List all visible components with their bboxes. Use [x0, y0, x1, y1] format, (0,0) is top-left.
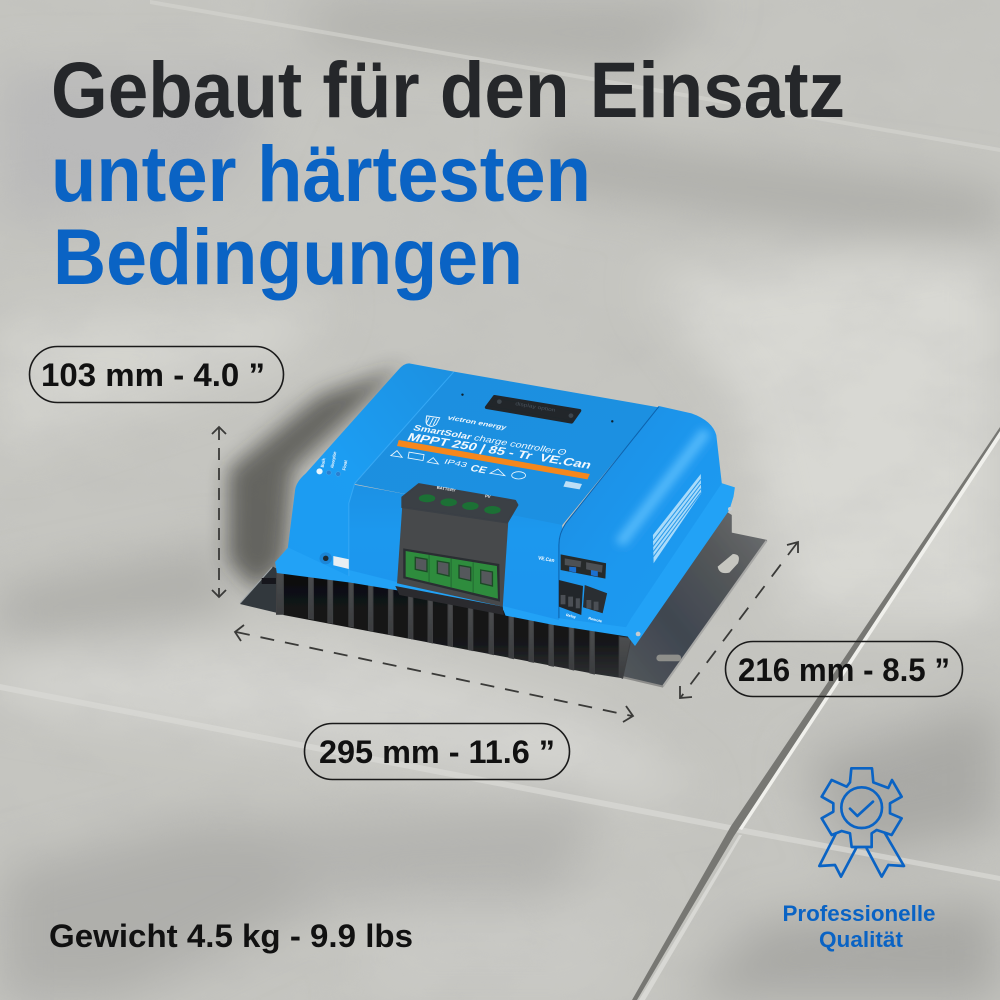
quality label: Professionelle — [782, 901, 936, 926]
pill: depth: 216 mm - 8.5 ” — [738, 652, 950, 688]
relay and remote connectors: Relay — [566, 613, 577, 620]
housing top face — [355, 372, 659, 525]
housing right cover — [559, 406, 722, 627]
victron logo — [422, 416, 440, 427]
title: unter härtesten — [51, 129, 591, 218]
warning icons — [391, 451, 525, 479]
CE mark: CE — [468, 464, 489, 476]
protection rating: IP43 — [443, 457, 469, 469]
title — [51, 45, 845, 301]
rating label — [653, 474, 701, 563]
pill: height: 103 mm - 4.0 ” — [41, 357, 265, 393]
terminal block — [395, 484, 518, 615]
quality label — [782, 901, 936, 952]
solar charge controller device — [240, 363, 767, 687]
screws — [461, 393, 613, 422]
flange screws — [636, 507, 732, 636]
quality label: Qualität — [819, 927, 904, 952]
height dimension arrow — [212, 427, 226, 597]
depth dimension arrow — [680, 542, 798, 698]
pill: depth — [726, 642, 962, 696]
pill: width: 295 mm - 11.6 ” — [319, 734, 555, 770]
pill: width — [304, 724, 570, 780]
terminal block: BATTERY — [436, 485, 456, 493]
VE.Can ports — [538, 554, 606, 579]
status LEDs — [316, 468, 341, 476]
housing left cover — [288, 363, 454, 576]
cast shadow of the device — [228, 366, 405, 590]
LED labels: Bulk — [320, 457, 326, 468]
display option plate: display option — [515, 401, 556, 414]
width dimension arrow — [235, 625, 633, 722]
LED labels: Absorption — [329, 451, 337, 468]
title: Gebaut für den Einsatz — [51, 45, 845, 134]
orange stripe — [397, 440, 590, 479]
blue base flange — [275, 483, 735, 646]
pill: height — [30, 346, 284, 402]
relay and remote connectors: Remote — [588, 616, 602, 624]
right mounting plate and side wall — [622, 507, 767, 687]
left mounting plate — [240, 567, 282, 614]
display option plate — [487, 397, 580, 422]
relay and remote connectors — [559, 580, 607, 624]
cover seam lines — [349, 372, 659, 618]
brand name: victron energy — [446, 415, 508, 431]
weight text: Gewicht 4.5 kg - 9.9 lbs — [49, 918, 413, 954]
USB port and dip dial — [320, 552, 349, 569]
product line: SmartSolar charge controller ʘ — [412, 423, 569, 457]
terminal block: PV — [485, 493, 491, 499]
printed labels on top — [320, 415, 594, 489]
LED labels: Float — [341, 459, 348, 471]
heat sink — [276, 563, 631, 678]
cover edge highlight — [623, 435, 704, 540]
title: Bedingungen — [53, 212, 523, 301]
housing front — [347, 483, 562, 620]
VE.Can ports: VE.Can — [538, 555, 555, 564]
icon: quality gear badge — [819, 768, 904, 877]
LED labels — [320, 451, 348, 471]
QR mark — [563, 481, 582, 489]
model name: MPPT 250 | 85 - Tr VE.Can — [405, 430, 594, 471]
